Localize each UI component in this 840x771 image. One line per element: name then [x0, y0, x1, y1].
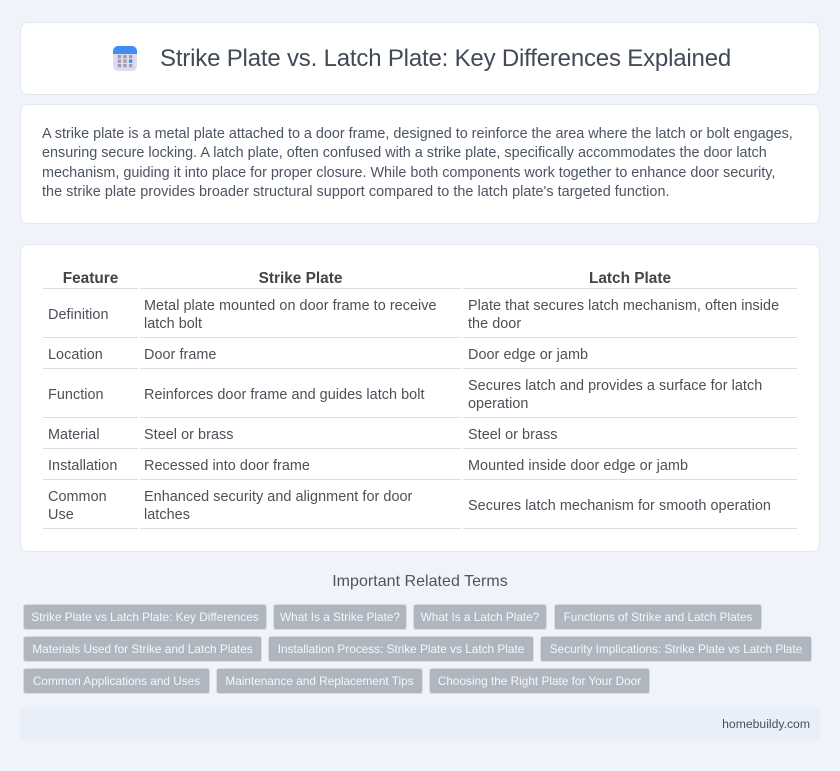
row: definition: latch bolt	[144, 316, 202, 332]
row: material	[48, 427, 557, 443]
related terms tags: Installation Process: Strike Plate vs Latch Plate	[278, 642, 524, 656]
row: location: Door frame	[144, 347, 216, 363]
row: common use: Enhanced security and alignment for door	[144, 489, 412, 505]
row: material: Steel or brass	[468, 427, 557, 443]
footer bar	[20, 707, 820, 741]
intro text	[42, 126, 793, 200]
related terms tags: Maintenance and Replacement Tips	[225, 674, 414, 688]
table header	[63, 270, 671, 287]
related terms tags: Materials Used for Strike and Latch Plates	[32, 642, 253, 656]
comparison table panel	[20, 244, 820, 552]
row: function: Function	[48, 387, 104, 403]
related terms tags: Functions of Strike and Latch Plates	[564, 610, 752, 624]
table header: Feature	[63, 270, 118, 287]
footer source text: homebuildy.com	[722, 717, 810, 731]
row: function: Reinforces door frame and guides latch bolt	[144, 387, 425, 403]
related terms tags: Choosing the Right Plate for Your Door	[438, 674, 641, 688]
row: common use	[48, 489, 771, 523]
row: location	[48, 347, 588, 363]
intro text: the strike plate provides broader structural support compared to the latch plate's targeted function.	[42, 184, 670, 200]
row: material: Material	[48, 427, 100, 443]
row: function: operation	[468, 396, 528, 412]
row: function: Secures latch and provides a surface for latch	[468, 378, 762, 394]
row: definition: Definition	[48, 307, 108, 323]
row: installation: Recessed into door frame	[144, 458, 310, 474]
comparison table	[43, 270, 797, 529]
related terms heading: Important Related Terms	[332, 573, 508, 590]
intro text: ensuring secure locking. A latch plate, often confused with a strike plate, specifically accommodates the door latch	[42, 145, 767, 161]
row: common use: Common	[48, 489, 107, 505]
row: common use: latches	[144, 507, 190, 523]
row: location: Door edge or jamb	[468, 347, 588, 363]
related terms tags: Strike Plate vs Latch Plate: Key Differences	[31, 610, 259, 624]
intro panel	[20, 104, 820, 224]
row: definition: the door	[468, 316, 521, 332]
row: installation: Mounted inside door edge or jamb	[468, 458, 688, 474]
row: installation: Installation	[48, 458, 117, 474]
header panel	[20, 22, 820, 95]
row: installation	[48, 458, 688, 474]
row: function	[48, 378, 762, 412]
related terms tags: What Is a Strike Plate?	[280, 610, 400, 624]
table header: Strike Plate	[259, 270, 342, 287]
row: material: Steel or brass	[144, 427, 233, 443]
row: common use: Secures latch mechanism for smooth operation	[468, 498, 771, 514]
row: common use: Use	[48, 507, 74, 523]
row: definition: Metal plate mounted on door frame to receive	[144, 298, 437, 314]
intro text: A strike plate is a metal plate attached to a door frame, designed to reinforce the area where the latch or bolt engages,	[42, 126, 793, 142]
title: Strike Plate vs. Latch Plate: Key Differences Explained	[160, 45, 731, 72]
row: location: Location	[48, 347, 103, 363]
intro text: mechanism, guiding it into place for proper closure. While both components work together to enhance door security,	[42, 165, 775, 181]
related terms tags: What Is a Latch Plate?	[421, 610, 539, 624]
table header: Latch Plate	[589, 270, 671, 287]
related terms tags	[23, 604, 812, 694]
icon: calendar	[113, 46, 137, 71]
related terms tags: Common Applications and Uses	[33, 674, 200, 688]
related terms tags: Security Implications: Strike Plate vs Latch Plate	[550, 642, 802, 656]
row: definition: Plate that secures latch mechanism, often inside	[468, 298, 779, 314]
row: definition	[48, 298, 779, 332]
